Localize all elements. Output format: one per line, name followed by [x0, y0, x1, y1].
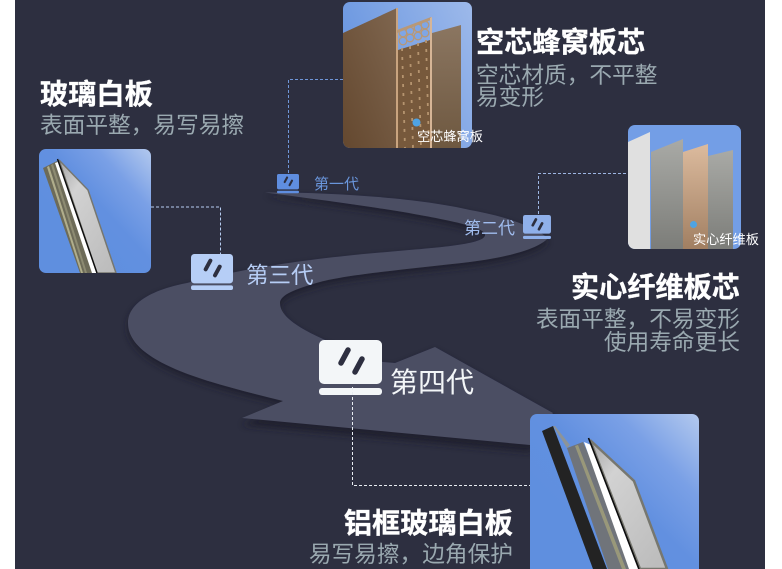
- swoosh arrow: [128, 192, 553, 452]
- icon: first generation: [277, 174, 299, 193]
- callout: hollow honeycomb board: [412, 118, 483, 144]
- heading: glass whiteboard: [40, 78, 244, 138]
- connector: third generation: [151, 207, 220, 254]
- connector: first generation: [288, 80, 343, 174]
- icon: second generation: [523, 215, 551, 239]
- heading: hollow honeycomb core: [476, 26, 658, 110]
- heading: solid fibre core: 使用寿命更长: [604, 329, 740, 355]
- heading: hollow honeycomb core: 空芯蜂窝板芯: [476, 26, 645, 58]
- heading: solid fibre core: 表面平整，不易变形: [536, 306, 740, 332]
- image: hollow honeycomb core: [343, 2, 472, 148]
- connector: fourth generation: [352, 387, 530, 486]
- heading: hollow honeycomb core: 易变形: [476, 84, 544, 110]
- heading: solid fibre core: 实心纤维板芯: [571, 271, 740, 303]
- heading: aluminium-framed glass whiteboard: 易写易擦，边角保护: [309, 541, 513, 567]
- heading: glass whiteboard: 表面平整，易写易擦: [40, 112, 244, 138]
- callout: solid fibre board: [690, 221, 759, 247]
- image: solid fibre core: [628, 125, 741, 249]
- label: second generation: 第二代: [464, 219, 515, 238]
- heading: glass whiteboard: 玻璃白板: [40, 78, 153, 110]
- label: third generation: 第三代: [246, 263, 314, 288]
- callout: solid fibre board: 实心纤维板: [693, 232, 759, 247]
- image: glass whiteboard: [39, 149, 151, 273]
- label: fourth generation: 第四代: [390, 367, 474, 398]
- callout: hollow honeycomb board: 空芯蜂窝板: [417, 128, 483, 144]
- connector: second generation: [538, 174, 626, 215]
- icon: fourth generation: [319, 340, 382, 395]
- heading: hollow honeycomb core: 空芯材质，不平整: [476, 62, 658, 88]
- heading: aluminium-framed glass whiteboard: [309, 507, 513, 567]
- image: aluminium-framed glass whiteboard: [530, 414, 699, 569]
- heading: solid fibre core: [536, 271, 740, 355]
- icon: third generation: [191, 254, 233, 290]
- label: first generation: 第一代: [314, 175, 359, 193]
- heading: aluminium-framed glass whiteboard: 铝框玻璃白板: [344, 507, 513, 539]
